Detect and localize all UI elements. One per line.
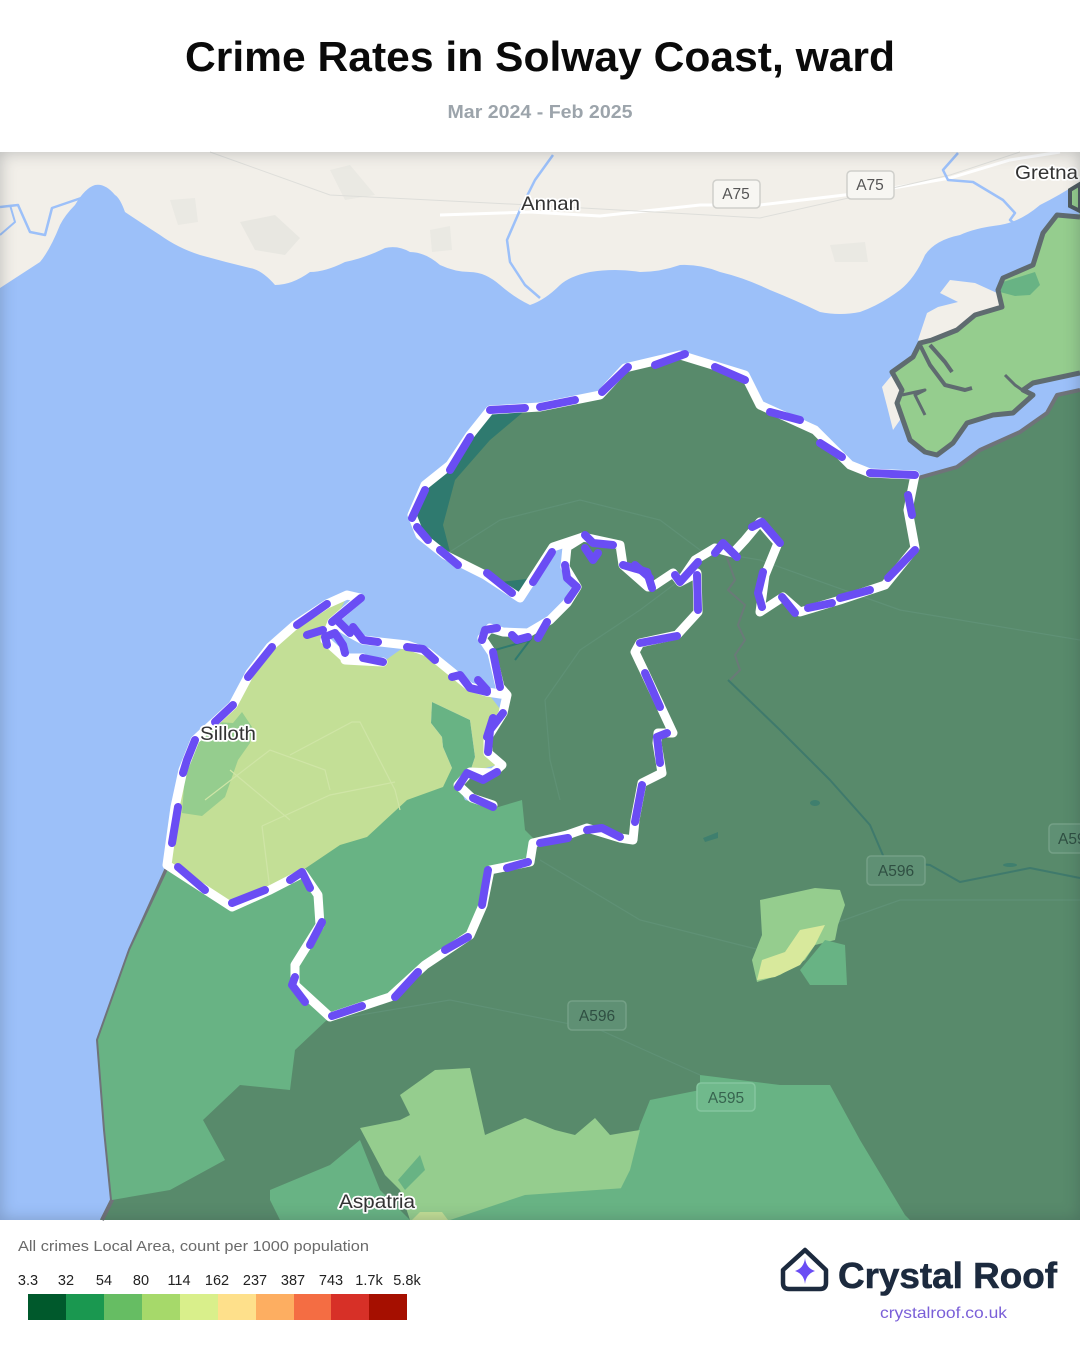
lakes (703, 800, 1017, 867)
road shields: A75 (856, 177, 884, 194)
road shields (568, 171, 1080, 1111)
legend values: 237 (243, 1273, 267, 1289)
area: Wigton (752, 888, 847, 985)
legend values: 114 (167, 1273, 191, 1289)
title: Crime Rates in Solway Coast, ward (185, 33, 895, 80)
logo: Crystal Roof (783, 1250, 1058, 1296)
road shields: A595 (708, 1090, 744, 1107)
area: north-east pale green headland (892, 212, 1080, 455)
legend values: 1.7k (355, 1273, 383, 1289)
ward boundary: white casing (167, 355, 915, 1017)
area: mid green south-west (98, 702, 535, 1200)
area: Aspatria (270, 1068, 640, 1220)
logo: Crystal Roof: Crystal Roof (838, 1255, 1058, 1296)
place labels: Annan (521, 193, 580, 215)
legend values: 743 (319, 1273, 343, 1289)
land: dark green, lowest crime band (98, 355, 1080, 1220)
legend values: 80 (133, 1273, 149, 1289)
north shore land (0, 152, 1080, 314)
legend caption: All crimes Local Area, count per 1000 population (18, 1238, 369, 1255)
area: top-right corner (1070, 184, 1080, 211)
legend values: 5.8k (393, 1273, 421, 1289)
legend values: 387 (281, 1273, 305, 1289)
place labels (200, 162, 1078, 1213)
road shields: A596 (579, 1008, 615, 1025)
tidal sandbanks (882, 280, 1000, 430)
legend colour bar (28, 1294, 407, 1320)
legend scale (18, 1273, 421, 1320)
ward boundary: purple dashes (172, 354, 915, 1016)
legend values: 54 (96, 1273, 112, 1289)
place labels: Silloth (200, 723, 256, 745)
legend values (18, 1273, 421, 1289)
area: Silloth town (182, 712, 252, 816)
place labels: Gretna (1015, 162, 1078, 184)
area: yellow-green Silloth rural (167, 597, 503, 905)
map panel (0, 152, 1080, 1220)
road shields: A596 (878, 863, 914, 880)
tidal teal slivers (415, 408, 535, 596)
rivers and roads on the land (330, 500, 1080, 1075)
coast outlines (98, 390, 1080, 1220)
legend values: 162 (205, 1273, 229, 1289)
area: south-east mid green (620, 1075, 910, 1220)
legend values: 32 (58, 1273, 74, 1289)
place labels: Aspatria (339, 1191, 415, 1213)
legend values: 3.3 (18, 1273, 38, 1289)
subtitle: date range: Mar 2024 - Feb 2025 (448, 102, 632, 122)
icon: house with star (783, 1250, 826, 1289)
faint roads on areas (205, 722, 400, 890)
sea (0, 152, 1080, 1220)
website link: crystalroof.co.uk (880, 1305, 1008, 1322)
map edge vignette (0, 152, 1080, 1220)
road shields: A75 (722, 186, 750, 203)
